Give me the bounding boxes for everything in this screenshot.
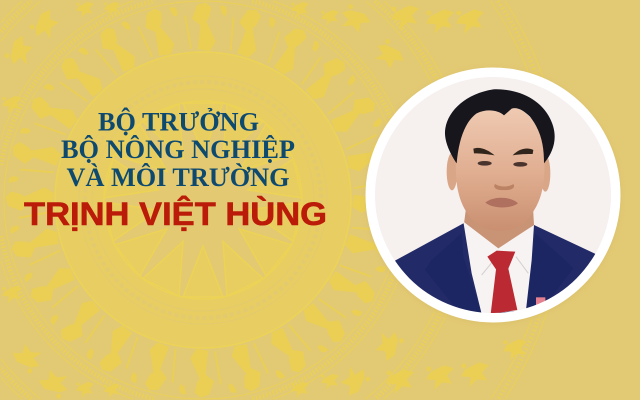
heading: position title: [61, 108, 295, 192]
heading: position title: VÀ MÔI TRƯỜNG: [66, 163, 290, 192]
eyebrows: [473, 148, 495, 155]
heading: position title: BỘ TRƯỞNG: [98, 108, 259, 136]
heading: position title: BỘ NÔNG NGHIỆP: [61, 135, 295, 164]
mouth: [485, 198, 518, 208]
lapel pin: [536, 297, 545, 305]
neck: [464, 210, 534, 248]
portrait frame: [365, 68, 621, 327]
eyes: [478, 161, 492, 166]
shirt: [463, 222, 534, 314]
central drum disc: [55, 52, 351, 348]
suit: [395, 223, 596, 313]
hair: [445, 89, 555, 163]
heading: minister name: TRỊNH VIỆT HÙNG: [24, 196, 327, 232]
tie: [487, 251, 517, 314]
drum star: [104, 103, 302, 297]
ears: [447, 153, 457, 190]
nose: [494, 184, 514, 190]
portrait photo: [395, 89, 596, 327]
face: [456, 108, 544, 212]
